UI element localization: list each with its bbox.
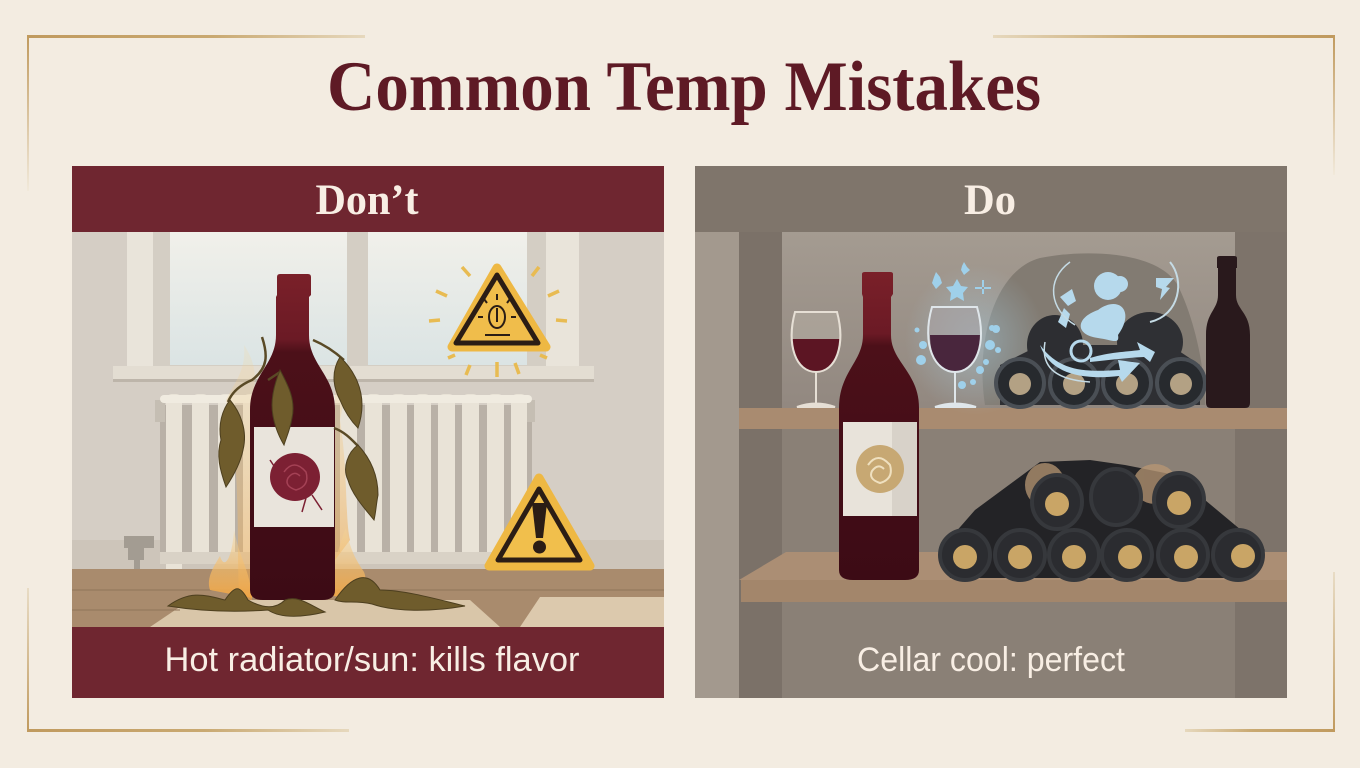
icon: exclamation warning triangle	[489, 478, 590, 566]
radiator	[155, 394, 535, 586]
gold rose emblem	[856, 445, 904, 493]
frame corner: bottom left	[27, 588, 349, 732]
stacked wine bottles	[940, 460, 1265, 580]
lower shelf	[739, 552, 1287, 602]
candle bulb glyph	[478, 294, 516, 335]
frame corner: top left	[27, 35, 365, 191]
glow behind chilled glass	[918, 280, 1033, 402]
bottle row in niche	[996, 312, 1205, 407]
flames	[209, 345, 366, 600]
frame corner: top right	[993, 35, 1335, 175]
caption text: hot radiator: Hot radiator/sun: kills flavor	[164, 641, 580, 679]
room wall	[72, 232, 664, 572]
upper shelf	[739, 408, 1287, 429]
cellar wall	[695, 232, 1287, 698]
illustration: cool cellar shelves	[695, 232, 1287, 698]
radiator valve	[124, 536, 154, 569]
wilted vine leaves	[168, 337, 465, 616]
icon: heat warning triangle	[429, 267, 567, 377]
panel: don't	[72, 166, 664, 698]
window	[113, 232, 594, 382]
frame corner: bottom right	[1185, 572, 1335, 732]
scorched rose emblem	[270, 453, 322, 512]
panel: do	[695, 166, 1287, 698]
heading: Don't: Don’t	[316, 177, 419, 224]
do panel header	[695, 166, 1287, 232]
caption text: cellar cool: Cellar cool: perfect	[857, 641, 1126, 679]
wine glass	[792, 312, 840, 407]
caption bar: don't	[72, 627, 664, 698]
illustration: bottle by hot radiator	[72, 232, 664, 627]
don't panel header	[72, 166, 664, 232]
stone niche	[982, 253, 1205, 405]
wooden floor	[72, 569, 664, 627]
chilled wine glass with sparkles	[914, 262, 1001, 407]
bottle: overheated wine	[250, 274, 335, 600]
bottle: properly stored wine	[839, 272, 919, 580]
dark wine bottle	[1206, 256, 1250, 408]
blue holographic temperature overlay	[1040, 262, 1178, 382]
baseboard	[72, 540, 664, 570]
cold bubbles and stars	[914, 262, 1001, 389]
heading: Do: Do	[964, 177, 1016, 224]
title: Common Temp Mistakes	[327, 48, 1041, 126]
